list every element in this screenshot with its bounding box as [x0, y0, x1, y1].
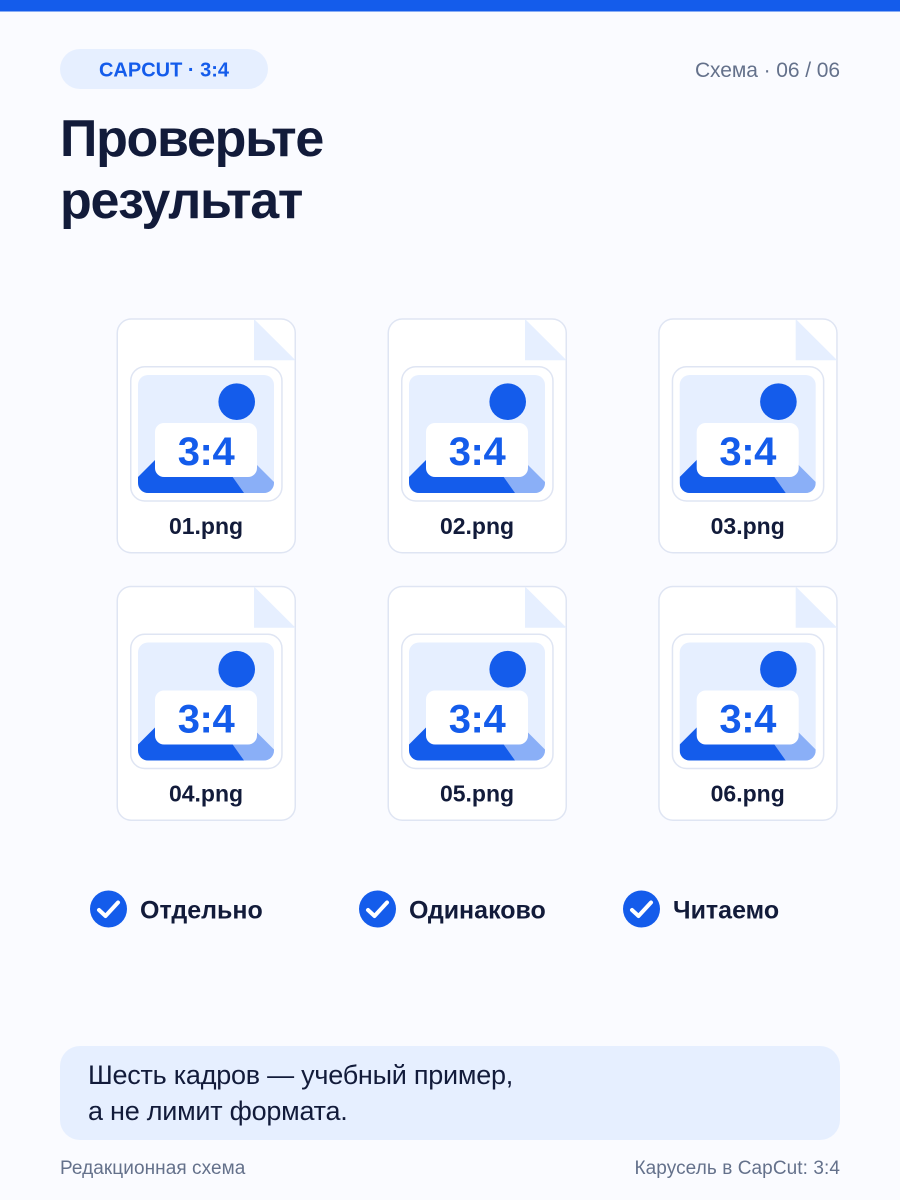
file card: 04.png: [117, 586, 296, 820]
page counter: Схема · 06 / 06: [695, 59, 840, 82]
title: Проверьте: [60, 110, 323, 168]
file card: 06.png: 3:4: [719, 698, 777, 742]
file card: 04.png: 04.png: [169, 780, 243, 806]
top accent bar: [0, 0, 900, 12]
checklist item: Читаемо: Читаемо: [673, 896, 779, 924]
callout note: Шесть кадров — учебный пример,: [88, 1060, 513, 1090]
file card: 01.png: 01.png: [169, 513, 243, 539]
category chip: CAPCUT · 3:4: [99, 60, 230, 82]
file card: 02.png: [388, 319, 566, 553]
checklist item: Читаемо: [623, 890, 779, 928]
file card: 05.png: [388, 586, 566, 820]
file card: 05.png: 3:4: [449, 698, 506, 742]
file card: 04.png: 3:4: [178, 698, 235, 742]
file card: 03.png: 3:4: [719, 430, 777, 474]
file card: 06.png: 06.png: [711, 780, 785, 806]
callout note: [60, 1046, 840, 1140]
file card: 05.png: 05.png: [440, 780, 514, 806]
file card: 02.png: 02.png: [440, 513, 514, 539]
file card: 02.png: 3:4: [449, 430, 506, 474]
checklist item: Одинаково: [359, 890, 546, 928]
file card: 06.png: [659, 586, 837, 820]
footer right: Карусель в CapCut: 3:4: [634, 1158, 840, 1179]
callout note: а не лимит формата.: [88, 1096, 348, 1126]
category chip: [60, 49, 268, 89]
checklist item: Отдельно: [90, 890, 263, 928]
checklist item: Одинаково: Одинаково: [409, 896, 546, 924]
file card: 03.png: [659, 319, 837, 553]
file grid: [117, 319, 837, 820]
file card: 01.png: 3:4: [178, 430, 235, 474]
footer left: Редакционная схема: [60, 1158, 246, 1179]
file card: 01.png: [117, 319, 296, 553]
file card: 03.png: 03.png: [711, 513, 785, 539]
title: результат: [60, 172, 303, 230]
checklist item: Отдельно: Отдельно: [140, 896, 263, 924]
